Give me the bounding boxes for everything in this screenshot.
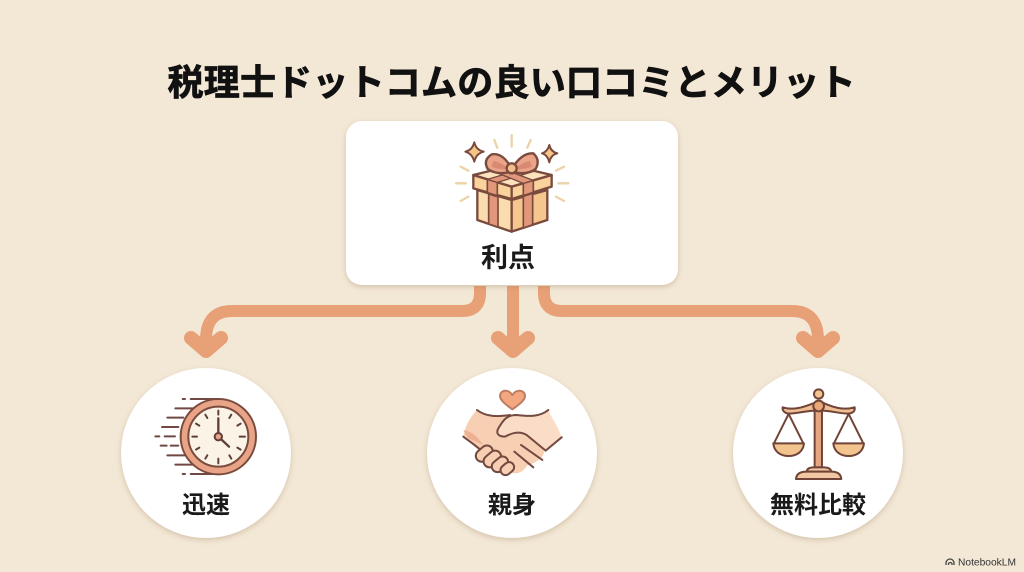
panel: kindness circle (427, 368, 597, 538)
icon: balance scale (773, 389, 864, 479)
title: 税理士ドットコムの良い口コミとメリット (168, 62, 856, 103)
panel: speed circle (121, 368, 291, 538)
arrow: to kindness (498, 286, 528, 351)
watermark: NotebookLM: NotebookLM (958, 556, 1016, 568)
label: speed: 迅速 (182, 492, 230, 519)
panel: benefits card (346, 121, 678, 285)
icon: handshake with heart (463, 391, 562, 477)
panel: free comparison circle (733, 368, 903, 538)
arrows: benefits to three items (191, 286, 833, 351)
icon: clock with speed lines (155, 399, 256, 474)
label: benefits: 利点 (481, 243, 535, 273)
label: kindness: 親身 (488, 492, 536, 519)
arrow: to free comparison (544, 286, 833, 351)
icon: gift box (456, 135, 568, 232)
arrow: to speed (191, 286, 480, 351)
label: free comparison: 無料比較 (770, 492, 866, 519)
icon: NotebookLM logo (946, 559, 954, 565)
